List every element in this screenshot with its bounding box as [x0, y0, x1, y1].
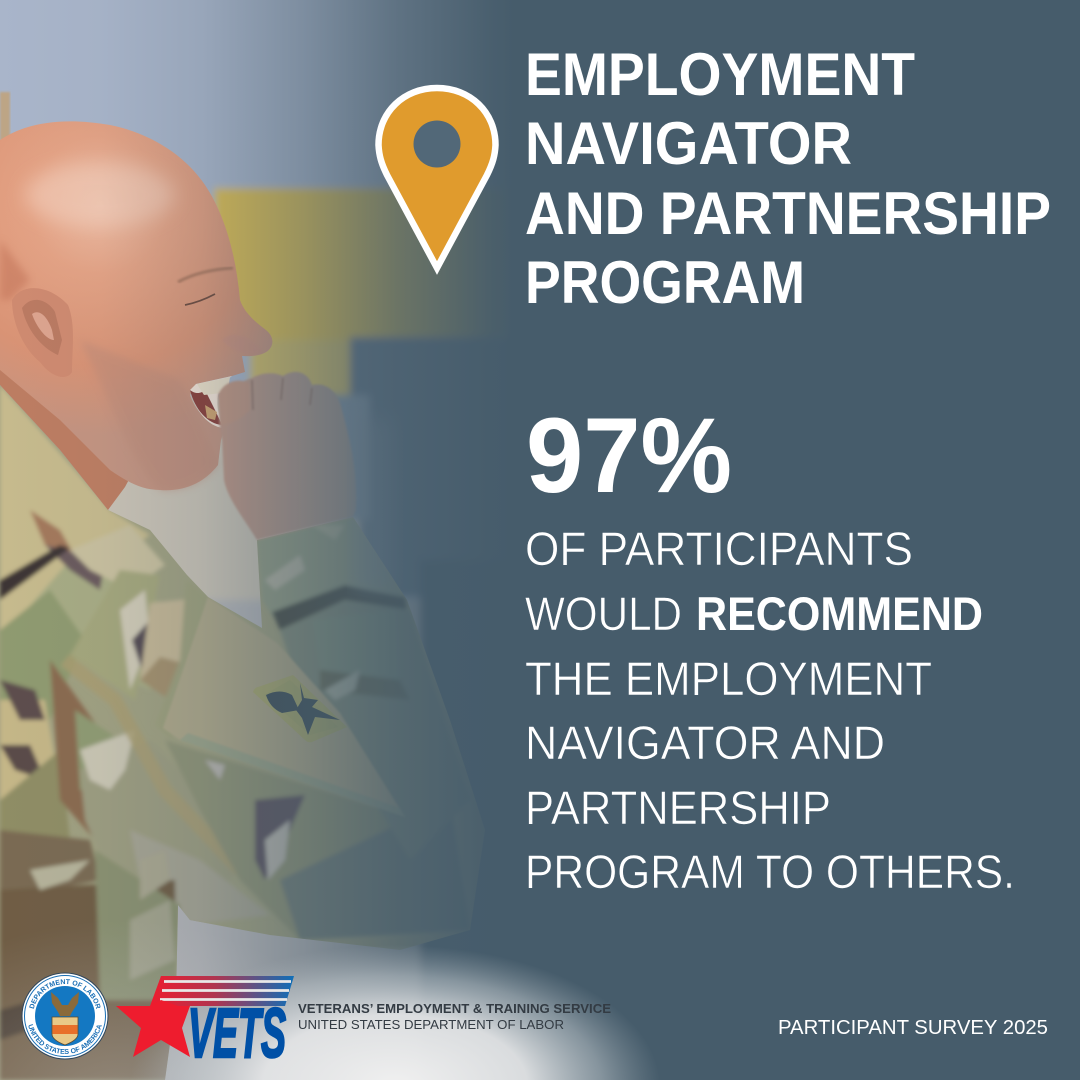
- title: NAVIGATOR: [525, 110, 852, 177]
- flag stripes: [150, 976, 294, 1006]
- room glow behind the hand: [355, 420, 395, 590]
- seam down sleeve: [62, 656, 224, 858]
- unit patch on sleeve: [253, 675, 347, 742]
- title: PROGRAM: [525, 249, 805, 316]
- gradient fade to slate panel: [0, 0, 560, 1080]
- logo: Department of Labor seal: DEPARTMENT OF LABOR: [29, 979, 100, 1009]
- mouth: [190, 376, 232, 428]
- statistic description: THE EMPLOYMENT: [525, 652, 932, 705]
- logo text: [298, 1001, 611, 1032]
- source note: PARTICIPANT SURVEY 2025: [778, 1017, 1048, 1039]
- hand at mouth: [218, 372, 356, 540]
- white glow behind logo: [120, 940, 670, 1080]
- ear: [12, 288, 73, 377]
- logo: VETS: [116, 976, 294, 1072]
- nose shade: [222, 335, 262, 354]
- title: EMPLOYMENT: [525, 41, 915, 108]
- red star: [116, 1000, 190, 1057]
- eyebrow: [178, 268, 233, 282]
- icon: location pin: [378, 88, 496, 268]
- statistic description: NAVIGATOR AND: [525, 716, 885, 769]
- uniform body: [0, 380, 500, 1080]
- logo text: VETERANS’ EMPLOYMENT & TRAINING SERVICE: [298, 1001, 611, 1016]
- neck and head: [0, 121, 272, 510]
- wall corner top left: [0, 92, 10, 142]
- head highlight: [25, 163, 175, 227]
- logo: Department of Labor seal: UNITED STATES OF AMERICA: [28, 1024, 102, 1054]
- statistic description: OF PARTICIPANTS: [525, 522, 913, 575]
- white haze bottom left: [0, 900, 400, 1080]
- statistic description: WOULD: [525, 587, 682, 640]
- eye crease: [185, 294, 215, 305]
- face shading on jaw: [80, 340, 218, 490]
- VETS letters: VETS: [188, 994, 286, 1072]
- statistic description: PROGRAM TO OTHERS.: [525, 845, 1015, 898]
- statistic description: PARTNERSHIP: [525, 781, 831, 834]
- statistic: 97%: 97%: [526, 395, 732, 515]
- velcro sleeve panel: [163, 597, 405, 817]
- statistic description: [525, 522, 1015, 898]
- shaded back of head: [0, 240, 30, 300]
- blurred room background: [0, 0, 510, 1080]
- title: [525, 41, 1051, 316]
- photo: laughing soldier in camouflage uniform: [0, 0, 510, 1080]
- forearm cuff: [260, 534, 297, 608]
- lower arm: [168, 742, 336, 928]
- statistic description: RECOMMEND: [696, 587, 983, 640]
- logo text: UNITED STATES DEPARTMENT OF LABOR: [298, 1017, 564, 1032]
- logo: Department of Labor seal: [22, 972, 108, 1060]
